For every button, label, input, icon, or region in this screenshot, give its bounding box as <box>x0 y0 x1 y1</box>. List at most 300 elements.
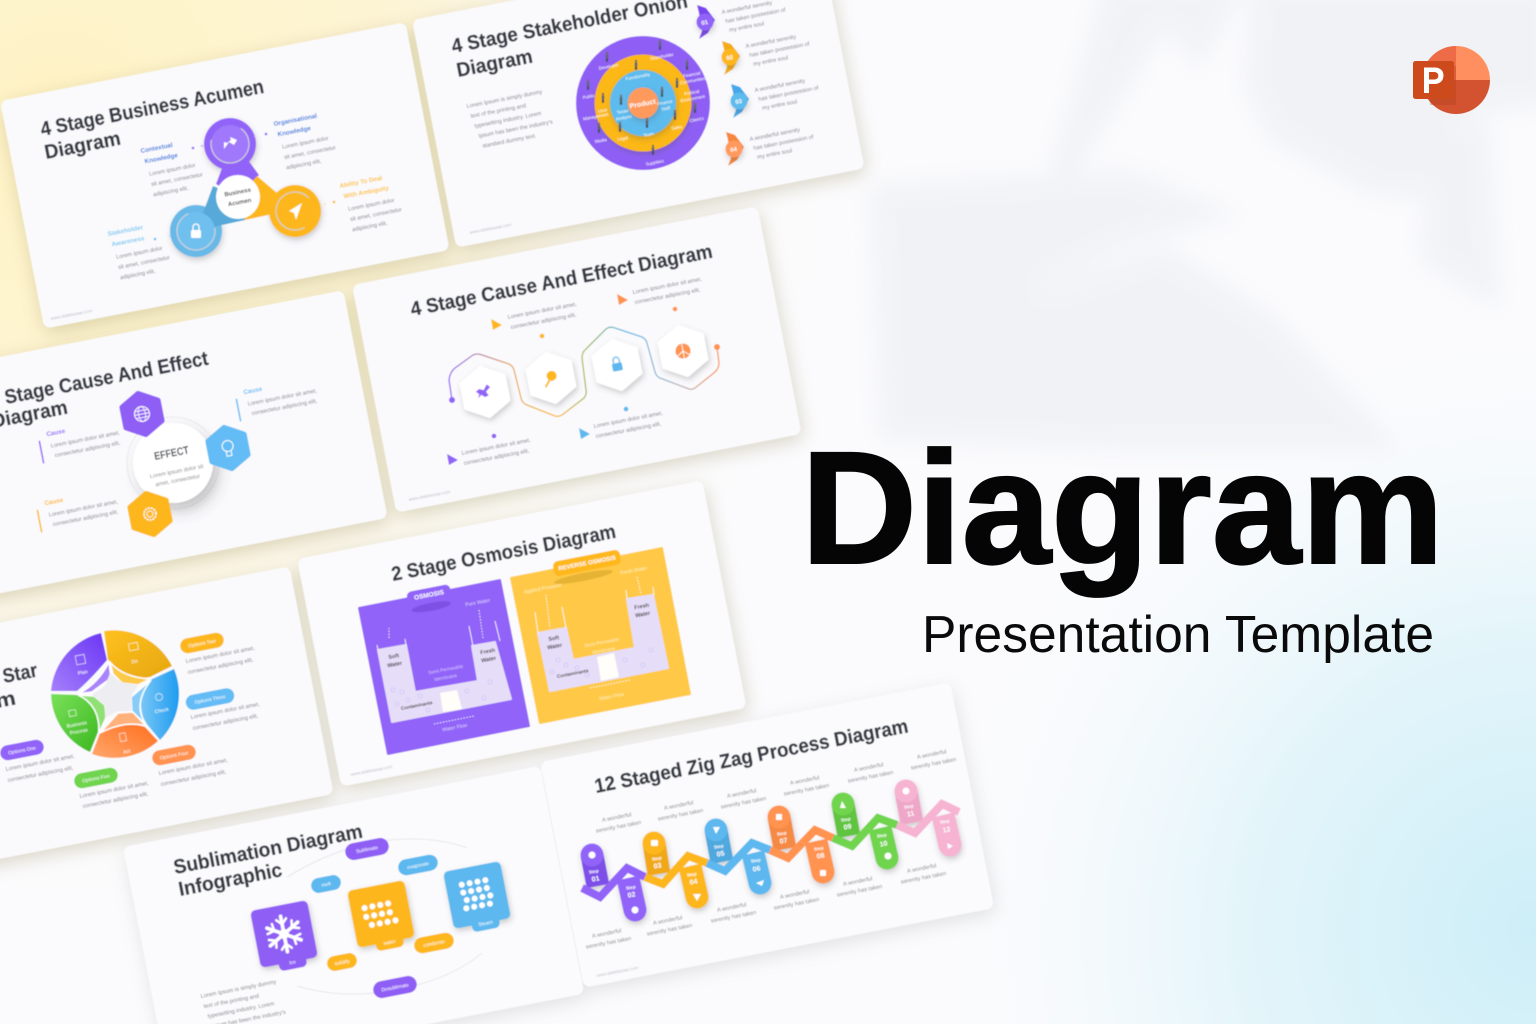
text block: Ipsum has been the industry's <box>478 119 553 140</box>
callout: yellow: consectetur adipiscing elit, <box>510 312 577 331</box>
heading <box>450 0 690 82</box>
step 11 <box>894 780 918 823</box>
hexagon: lock <box>591 336 643 394</box>
label: stakeholder awareness: Stakeholder <box>107 224 144 238</box>
cause: blue <box>234 376 320 422</box>
stage chip 02: 02 <box>726 55 734 62</box>
icon: paper plane <box>289 203 302 220</box>
connector dots <box>154 133 335 240</box>
panel: slide 4 stage cause and effect <box>352 206 802 513</box>
option one <box>0 738 76 784</box>
pill: desublimate <box>372 974 418 1000</box>
stage chip 04: 04 <box>730 147 738 154</box>
reverse osmosis labels: Contaminants <box>557 668 589 680</box>
label: stakeholder awareness: Awareness <box>111 235 145 248</box>
card <box>0 22 450 329</box>
captions above ribbon: serenity has taken <box>720 796 767 811</box>
label: contextual knowledge: Contextual <box>140 142 174 155</box>
pill: solidify: solidify <box>334 958 351 967</box>
label: ability to deal: Ability To Deal <box>339 175 383 190</box>
card <box>540 682 994 988</box>
effect circle <box>127 417 219 509</box>
reverse osmosis labels: Water Flow <box>599 692 625 702</box>
footer: www.slidebazaar.com <box>596 965 639 978</box>
effect circle: Lorem ipsum dolor sit <box>150 464 204 480</box>
pill: melt <box>310 874 342 894</box>
step 12 <box>938 815 962 856</box>
option two <box>179 631 256 676</box>
step 04: 04 <box>689 878 698 887</box>
heading: 4 Stage Cause And Effect Diagram <box>409 241 714 321</box>
wheel labels: Plan <box>77 669 89 677</box>
star center <box>92 673 138 718</box>
cause: purple: Cause <box>46 428 66 438</box>
label: contextual knowledge: sit amet, consectetur <box>151 172 204 188</box>
background: blurred leaf shadows <box>870 0 1536 450</box>
text block: Lorem Ipsum is simply dummy <box>466 89 543 110</box>
onion labels: Political <box>684 89 700 96</box>
cause: yellow: Lorem ipsum dolor sit amet, <box>48 499 119 519</box>
zig zag ribbon <box>582 804 959 897</box>
step 05: 05 <box>716 850 725 859</box>
stage chip 02 <box>722 41 740 75</box>
label: ability to deal: sit amet, consectetur <box>350 207 403 223</box>
label: organisational knowledge: Lorem ipsum dolor <box>282 136 329 151</box>
label: contextual knowledge: Knowledge <box>144 152 179 165</box>
cause: blue: Lorem ipsum dolor sit amet, <box>247 388 318 408</box>
text block: standard dummy text. <box>482 133 537 150</box>
captions above ribbon <box>594 748 957 835</box>
osmosis labels: Contaminants <box>401 700 433 712</box>
step 05 <box>704 818 728 862</box>
callout: purple: consectetur adipiscing elit, <box>463 448 530 467</box>
onion labels: Functionality <box>625 72 651 81</box>
hexagon: pin <box>459 363 511 421</box>
pill: solidify <box>326 952 358 972</box>
footer: www.slidebazaar.com <box>408 489 451 502</box>
step 04 <box>686 866 708 908</box>
step 11: 11 <box>906 810 915 819</box>
reverse osmosis labels: Soft <box>548 635 560 643</box>
onion labels: Environment <box>680 94 706 103</box>
panel: slide 2 stage osmosis <box>297 480 747 787</box>
effect circle: EFFECT <box>153 444 190 463</box>
text: stage 02: A wonderful serenity <box>745 34 797 50</box>
captions above ribbon: A wonderful <box>602 812 632 824</box>
text: stage 02: has taken possession of <box>749 41 810 59</box>
text: stage 01 <box>721 0 788 35</box>
text block: text of the printing and <box>470 103 527 120</box>
heading <box>0 348 210 433</box>
option three: Lorem ipsum dolor sit amet, <box>190 702 261 721</box>
heading <box>39 76 266 164</box>
step 09 <box>832 792 854 836</box>
onion labels: Sales <box>671 124 683 131</box>
step 12: Step <box>939 818 950 825</box>
pill: melt: melt <box>321 881 332 889</box>
captions below ribbon: serenity has taken <box>646 923 693 938</box>
pill: condense: condense <box>423 939 446 949</box>
text: stage 01: A wonderful serenity <box>721 0 773 16</box>
reverse osmosis labels: Applied Pressure <box>524 582 562 596</box>
icon: blue hexagon bulb <box>206 424 250 472</box>
cause: blue: consectetur adipiscing elit, <box>251 398 318 417</box>
label: ability to deal: With Ambiguity <box>343 185 390 200</box>
stage chip 01 <box>696 5 715 39</box>
onion labels: Staff <box>661 105 671 112</box>
footer: www.slidebazaar.com <box>350 764 393 777</box>
option four: consectetur adipiscing elit, <box>160 769 227 788</box>
callout: orange: consectetur adipiscing elit, <box>634 287 701 306</box>
label: organisational knowledge: Knowledge <box>277 125 312 138</box>
step 07: Step <box>776 830 787 837</box>
pill: condense <box>413 931 455 955</box>
text block: typesetting industry. Lorem <box>207 1001 275 1020</box>
capsule icons <box>588 788 953 914</box>
option five <box>73 766 150 810</box>
step 06 <box>748 853 772 894</box>
wheel labels <box>66 642 170 756</box>
osmosis labels: Water Flow <box>442 723 468 733</box>
stage chip 03: 03 <box>735 99 743 106</box>
reverse osmosis labels <box>524 565 652 702</box>
option three: Options Three <box>194 694 226 706</box>
option five: consectetur adipiscing elit, <box>82 791 149 810</box>
cause: blue: Cause <box>243 386 263 396</box>
center label: business acumen: Acumen <box>228 198 252 208</box>
heading: Star <box>1 660 40 688</box>
onion labels: Media <box>594 137 608 144</box>
heading: Diagram <box>43 128 123 164</box>
text: stage 02: my entire soul <box>753 55 789 68</box>
onion labels: Suppliers <box>645 158 665 167</box>
zig zag capsules <box>580 780 962 922</box>
wheel labels: Process <box>69 727 89 737</box>
heading: Diagram <box>455 46 535 82</box>
callout: blue: consectetur adipiscing elit, <box>595 421 662 440</box>
step 06: Step <box>750 857 761 864</box>
osmosis labels: Membrane <box>434 673 458 683</box>
osmosis labels: Pure Water <box>465 598 491 608</box>
hexagon path line <box>449 327 719 416</box>
panel: slide 4 stage business acumen <box>0 22 450 329</box>
pill: evaporate <box>397 853 439 877</box>
panel: slide star diagram <box>0 566 334 873</box>
captions below ribbon: serenity has taken <box>585 936 632 951</box>
label: organisational knowledge: adipiscing elit, <box>286 159 322 171</box>
label: contextual knowledge <box>140 137 206 199</box>
heading: 12 Staged Zig Zag Process Diagram <box>593 715 910 798</box>
step 10 <box>876 828 898 870</box>
card <box>297 480 747 787</box>
panel: slide 4 stage stakeholder onion <box>412 0 865 248</box>
tile: ice <box>250 900 319 975</box>
icon: pin <box>224 137 237 149</box>
cause: yellow: consectetur adipiscing elit, <box>52 509 119 528</box>
text: stage 04 <box>749 125 816 162</box>
label: organisational knowledge: Organisational <box>273 113 318 128</box>
label: ability to deal <box>339 172 405 234</box>
onion diagram: Product <box>629 98 657 110</box>
callout: blue: Lorem ipsum dolor sit amet, <box>593 411 664 430</box>
footer: www.slidebazaar.com <box>50 308 93 321</box>
tile: steam: Steam <box>478 920 493 928</box>
osmosis labels: Water <box>387 660 404 669</box>
captions above ribbon: serenity has taken <box>847 770 894 785</box>
callout: orange: Lorem ipsum dolor sit amet, <box>632 277 703 296</box>
osmosis labels: Water <box>481 655 498 664</box>
tile: steam <box>443 861 512 936</box>
step 01: Step <box>588 868 599 875</box>
onion labels: Developer <box>598 62 620 71</box>
label: ability to deal: adipiscing elit, <box>352 221 388 233</box>
star petals <box>78 662 151 733</box>
text: stage 01: has taken possession of <box>725 7 786 25</box>
captions below ribbon: serenity has taken <box>900 871 947 886</box>
tile: ice: Ice <box>289 959 297 966</box>
option two: Options Two <box>188 638 217 650</box>
text block <box>466 89 555 151</box>
captions below ribbon: serenity has taken <box>836 884 883 899</box>
onion labels: Finance <box>657 98 673 106</box>
text block: Lorem Ipsum is simply dummy <box>200 979 277 1000</box>
captions above ribbon: serenity has taken <box>657 808 704 823</box>
option five: Options Five <box>82 773 111 785</box>
osmosis tab: OSMOSIS <box>414 589 445 602</box>
onion labels: Shareholder <box>649 52 674 61</box>
onion labels: Communities <box>680 75 707 85</box>
label: ability to deal: Lorem ipsum dolor <box>348 198 395 213</box>
text: stage 03: A wonderful serenity <box>754 78 806 94</box>
captions below ribbon: A wonderful <box>653 915 683 927</box>
panel: slide 3 stage cause and effect <box>0 290 388 597</box>
step 09: 09 <box>843 823 852 832</box>
step 12: 12 <box>942 826 951 835</box>
heading <box>172 821 364 901</box>
step 02: Step <box>625 884 636 891</box>
label: contextual knowledge: Lorem ipsum dolor <box>149 163 196 178</box>
onion labels: Tester <box>616 108 630 115</box>
step 06: 06 <box>752 865 761 874</box>
card <box>123 766 584 1024</box>
panel: slide 12 staged zig zag <box>540 682 994 988</box>
icon: lock <box>191 224 201 238</box>
star wheel <box>51 630 179 758</box>
step 03 <box>642 832 666 874</box>
reverse osmosis labels: Membrane <box>592 646 616 656</box>
callout: yellow: Lorem ipsum dolor sit amet, <box>507 302 578 321</box>
onion labels: Public <box>582 93 596 100</box>
heading: 4 Stage Business Acumen <box>39 76 266 141</box>
heading: Sublimation Diagram <box>172 821 364 879</box>
step 07 <box>768 806 790 849</box>
icon: purple hexagon globe <box>120 390 164 438</box>
slide cards and diagrams <box>0 0 994 1024</box>
stage chip 03 <box>730 84 749 118</box>
wheel labels: Check <box>154 707 170 715</box>
step 03: Step <box>651 855 662 862</box>
diagram: tri-lobed acumen <box>170 118 321 257</box>
label: contextual knowledge: adipiscing elit, <box>153 186 189 198</box>
step 09: Step <box>840 816 851 823</box>
osmosis labels: Fresh <box>480 648 496 656</box>
captions below ribbon: A wonderful <box>843 876 873 888</box>
heading: Stage Cause And Effect <box>3 348 210 409</box>
card <box>0 290 388 597</box>
reverse osmosis labels: Semi Permeable <box>584 637 620 649</box>
stage chip 01: 01 <box>701 20 709 27</box>
callout: purple: Lorem ipsum dolor sit amet, <box>461 438 532 457</box>
captions below ribbon: A wonderful <box>780 889 810 901</box>
reverse osmosis labels: Fresh <box>634 603 650 611</box>
option four: Options Four <box>159 750 189 762</box>
captions above ribbon: A wonderful <box>664 800 694 812</box>
captions below ribbon: serenity has taken <box>710 910 757 925</box>
card <box>412 0 865 248</box>
purple osmosis panel <box>359 580 529 754</box>
captions below ribbon: A wonderful <box>717 902 747 914</box>
wheel labels: Business <box>66 720 88 730</box>
tile: water <box>347 880 416 955</box>
cause: purple: consectetur adipiscing elit, <box>54 440 121 459</box>
text block: typesetting industry. Lorem <box>474 111 542 130</box>
text block: text of the printing and <box>203 993 260 1010</box>
text: stage 03: has taken possession of <box>758 85 819 103</box>
onion labels: Legal <box>617 135 628 142</box>
footer: www.slidebazaar.com <box>469 222 512 235</box>
captions below ribbon: A wonderful <box>907 863 937 875</box>
captions below ribbon: A wonderful <box>592 928 622 940</box>
card <box>0 566 334 873</box>
label: stakeholder awareness: sit amet, consectetur <box>118 255 171 271</box>
step 04: Step <box>686 871 697 878</box>
osmosis labels <box>387 598 498 733</box>
onion diagram <box>576 36 710 170</box>
osmosis labels: Semi Permeable <box>428 664 464 676</box>
step 02: 02 <box>627 891 636 900</box>
option one: consectetur adipiscing elit, <box>7 765 74 784</box>
icon: yellow hexagon gear <box>128 490 172 538</box>
option two: consectetur adipiscing elit, <box>187 657 254 676</box>
step 08: 08 <box>816 852 825 861</box>
heading: Infographic <box>177 859 284 901</box>
reverse osmosis tab <box>550 549 624 587</box>
step 05: Step <box>713 843 724 850</box>
option four: Lorem ipsum dolor sit amet, <box>158 758 229 777</box>
step 01: 01 <box>591 875 600 884</box>
reverse osmosis labels: Water <box>635 610 652 619</box>
option four <box>151 743 229 788</box>
wheel labels: Act <box>123 748 132 756</box>
text block <box>200 979 286 1024</box>
osmosis labels: Soft <box>388 653 400 661</box>
onion labels: Financial <box>683 70 701 79</box>
tile: water: water <box>383 939 397 947</box>
callout: orange <box>617 277 703 311</box>
text: stage 04: has taken possession of <box>753 134 814 152</box>
label: organisational knowledge: sit amet, consectetur <box>284 145 337 161</box>
step 03: 03 <box>653 862 662 871</box>
stage chip 04 <box>726 132 744 166</box>
center label: business acumen <box>216 175 260 219</box>
label: organisational knowledge <box>273 110 339 172</box>
title: Diagram: Diagram <box>801 418 1444 597</box>
heading <box>0 660 40 713</box>
option three: consectetur adipiscing elit, <box>192 713 259 732</box>
card <box>352 206 802 513</box>
captions below ribbon <box>584 862 947 951</box>
stakeholder figures <box>587 40 696 155</box>
line end dots <box>449 344 720 403</box>
captions below ribbon: serenity has taken <box>773 897 820 912</box>
cause: yellow: Cause <box>44 497 64 507</box>
captions above ribbon: serenity has taken <box>910 757 957 772</box>
step 11: Step <box>903 803 914 810</box>
cycle arcs <box>287 839 482 994</box>
onion labels: Team <box>643 131 655 138</box>
text: stage 03: my entire soul <box>762 99 798 112</box>
pill: sublimate <box>344 836 390 862</box>
cause: purple: Lorem ipsum dolor sit amet, <box>50 430 121 450</box>
effect circle: amet, consectetur <box>155 474 201 488</box>
step 10: Step <box>876 832 887 839</box>
card drop shadows <box>0 0 996 1024</box>
step 08: Step <box>813 845 824 852</box>
captions above ribbon: A wonderful <box>727 788 757 800</box>
cause: yellow <box>35 487 121 533</box>
label: stakeholder awareness <box>107 220 173 282</box>
text: stage 03 <box>754 76 821 113</box>
pill: evaporate: evaporate <box>407 861 430 871</box>
captions above ribbon: serenity has taken <box>595 820 642 835</box>
step 10: 10 <box>879 840 888 849</box>
option three <box>185 687 261 732</box>
captions above ribbon: A wonderful <box>790 775 820 787</box>
heading: 2 Stage Osmosis Diagram <box>390 521 618 586</box>
pill: desublimate: Desublimate <box>381 982 410 994</box>
option five: Lorem ipsum dolor sit amet, <box>79 781 150 800</box>
step 01 <box>580 844 604 886</box>
text: stage 04: my entire soul <box>757 148 793 161</box>
reverse osmosis labels: Water <box>547 642 564 651</box>
subtitle: Presentation Template: Presentation Template <box>922 606 1434 664</box>
callout: blue <box>579 407 664 440</box>
onion labels: Management <box>583 111 610 121</box>
captions above ribbon: serenity has taken <box>783 783 830 798</box>
text: stage 04: A wonderful serenity <box>749 127 801 143</box>
option one: Lorem ipsum dolor sit amet, <box>5 754 76 773</box>
callout: purple <box>447 434 532 467</box>
panel: slide sublimation <box>123 766 584 1024</box>
onion labels <box>582 52 707 167</box>
hexagon: pie <box>657 322 709 380</box>
cause: purple <box>37 418 123 464</box>
wheel labels: Do <box>131 658 139 666</box>
yellow reverse osmosis panel <box>511 548 690 723</box>
icon: PowerPoint logo <box>1413 46 1490 114</box>
step 08 <box>812 841 834 884</box>
onion labels: Client's <box>689 116 705 123</box>
onion labels: Analysis <box>615 113 633 122</box>
label: stakeholder awareness: Lorem ipsum dolor <box>116 246 163 261</box>
center label: business acumen: Business <box>224 187 252 199</box>
captions above ribbon: A wonderful <box>854 762 884 774</box>
option one: Options One <box>8 745 37 757</box>
reverse osmosis labels: Fresh Water <box>620 565 648 577</box>
step 02 <box>624 878 646 922</box>
pill: sublimate: Sublimate <box>356 845 379 855</box>
hexagon: key <box>525 349 577 407</box>
